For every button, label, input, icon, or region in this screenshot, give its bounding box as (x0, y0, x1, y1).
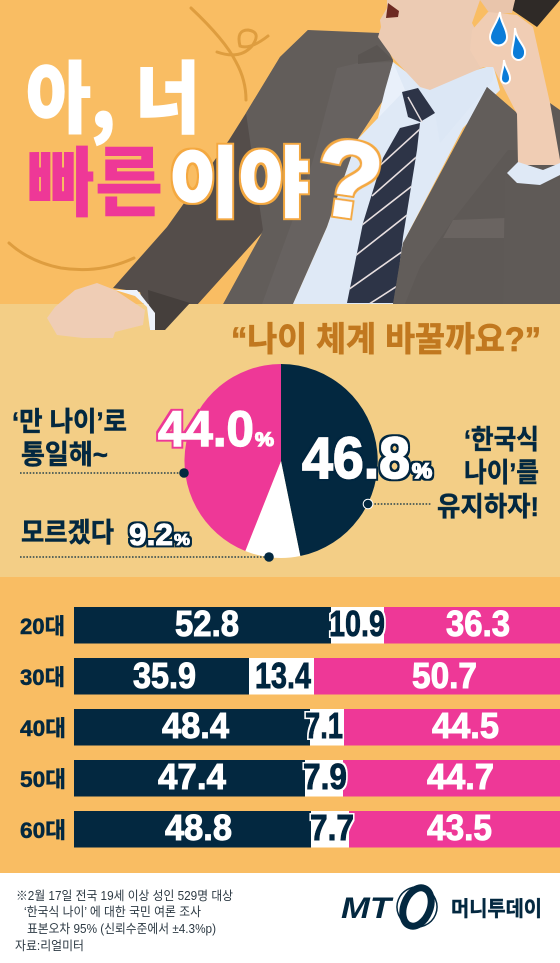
bar: 20s: 10.9 (329, 603, 385, 644)
value 46.8%: 46.8 (302, 426, 410, 491)
panel: age bars (0, 577, 560, 873)
jacket cuff over panel (148, 290, 190, 330)
logo: MoneyToday: 머니투데이 (451, 898, 542, 921)
bar: 20s: 20대 (20, 614, 65, 639)
label: man age: ‘만 나이’로 (12, 407, 127, 437)
header background (0, 0, 560, 304)
scribble decoration (9, 8, 268, 270)
tie (345, 88, 435, 315)
logo ring (391, 881, 443, 933)
label: don't know: 모르겠다 (21, 518, 114, 548)
label: Korean age: 유지하자! (437, 492, 539, 522)
bar: 20s: 52.8 (175, 603, 239, 644)
illustration: man in suit (113, 0, 560, 330)
pink word: 빠른 (27, 122, 163, 232)
right collar (417, 65, 493, 143)
left collar (378, 62, 405, 118)
bar: 50s (20, 756, 560, 797)
bar: 50s: 44.7 (427, 756, 494, 797)
pie chart (184, 364, 378, 558)
title: line two (27, 115, 390, 244)
label: Korean age (437, 425, 539, 522)
label: Korean age: ‘한국식 (464, 425, 539, 455)
open mouth (386, 3, 399, 18)
sweat drops (490, 12, 525, 84)
pointing hand (47, 283, 145, 338)
value 9.2%: 9.2 (129, 517, 173, 552)
slice: don't know (245, 461, 300, 558)
title: line one: 아, 너 (26, 37, 200, 149)
leader line: Korean age (363, 499, 431, 509)
survey notes: 자료:리얼미터 (15, 939, 84, 953)
label: Korean age: 나이’를 (464, 458, 539, 488)
value 9.2%: % (174, 532, 190, 549)
bar: 60s: 43.5 (427, 807, 492, 848)
panel: pie section background (0, 283, 560, 577)
logo: MoneyToday (341, 881, 542, 933)
leader line: don't know (20, 552, 274, 562)
bar: 50s: 47.4 (158, 756, 226, 797)
panel: footer (0, 873, 560, 963)
bar: 40s: 40대 (20, 716, 66, 741)
bar: 40s: 48.4 (162, 705, 229, 746)
bar: 30s: 50.7 (412, 655, 477, 696)
bar: 50s: 7.9 (303, 756, 347, 797)
shirt (293, 62, 500, 304)
left sleeve (113, 30, 308, 330)
label: man age (12, 407, 127, 470)
bar: 30s: 13.4 (255, 655, 311, 696)
left lapel (262, 62, 393, 304)
bar: 20s (20, 603, 560, 644)
hair (512, 0, 560, 27)
label: man age: 통일해~ (21, 440, 108, 470)
bar: 30s: 30대 (20, 665, 65, 690)
bar: 40s: 44.5 (432, 705, 499, 746)
value 46.8%: % (412, 460, 432, 483)
bar: 30s: 35.9 (133, 655, 196, 696)
collar notch (358, 45, 393, 64)
right lapel (393, 87, 518, 304)
torso left panel (223, 30, 393, 304)
bar: 30s (20, 655, 560, 696)
shirt cuff (507, 162, 560, 185)
bar: 50s: 50대 (20, 767, 66, 792)
orange gap between arm and torso (198, 233, 262, 304)
logo: MoneyToday: MT (341, 892, 394, 925)
bar: 60s: 7.7 (310, 807, 354, 848)
bar: 60s: 60대 (20, 818, 66, 843)
value 44.0%: 44.0 (158, 401, 254, 457)
raised hand and wrist (470, 12, 560, 165)
bar: 40s: 7.1 (305, 705, 343, 746)
survey notes: ‘한국식 나이’ 에 대한 국민 여론 조사 (24, 905, 201, 919)
bar: 60s (20, 807, 560, 848)
slice: keep Korean age (281, 364, 378, 556)
right sleeve (503, 175, 560, 304)
white word: 이야 (169, 122, 309, 232)
survey notes: 표본오차 95% (신뢰수준에서 ±4.3%p) (27, 922, 216, 936)
survey notes (15, 889, 233, 953)
jacket pocket (443, 218, 505, 238)
face and neck (378, 0, 493, 90)
right jacket (393, 87, 560, 304)
bar: 40s (20, 705, 560, 746)
leader line: man age (20, 468, 189, 478)
ear (480, 0, 515, 14)
shirt cuff at hand (115, 290, 155, 330)
bar: 60s: 48.8 (165, 807, 232, 848)
slice: unify to man age (184, 364, 281, 551)
pie heading: “나이 체계 바꿀까요?” (231, 321, 541, 359)
survey notes: ※2월 17일 전국 19세 이상 성인 529명 대상 (16, 889, 233, 903)
value 44.0%: % (255, 430, 274, 451)
bar: 20s: 36.3 (446, 603, 510, 644)
question mark: ? (308, 115, 390, 244)
